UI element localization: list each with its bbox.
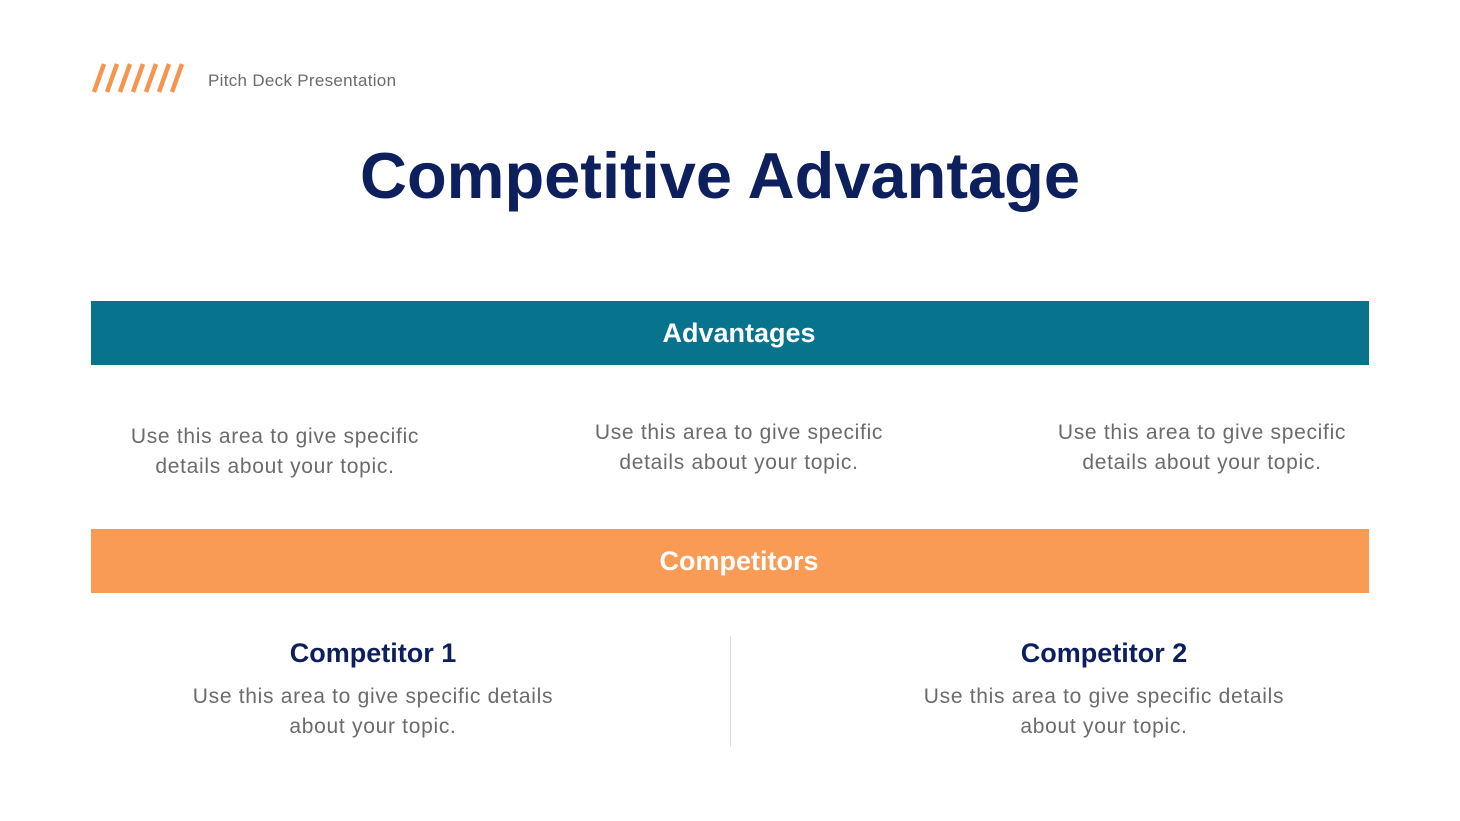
advantage text 3 — [1058, 421, 1346, 474]
competitor 1: about your topic. — [289, 715, 457, 738]
advantage text 2: Use this area to give specific — [595, 421, 883, 444]
advantage text 2: details about your topic. — [619, 451, 859, 474]
competitor 1 — [193, 638, 553, 738]
competitor 2: Competitor 2 — [1021, 638, 1187, 668]
competitor 2 — [924, 638, 1284, 738]
competitor 2: Use this area to give specific details — [924, 685, 1284, 708]
competitors bar — [91, 529, 1369, 593]
header label: Pitch Deck Presentation — [208, 71, 396, 90]
title: Competitive Advantage — [360, 139, 1080, 212]
divider — [730, 636, 731, 746]
advantages bar — [91, 301, 1369, 365]
competitor 1: Competitor 1 — [290, 638, 456, 668]
advantage text 1: Use this area to give specific — [131, 425, 419, 448]
advantage text 1 — [131, 425, 419, 478]
icon: orange stripes — [92, 63, 184, 93]
competitor 2: about your topic. — [1020, 715, 1188, 738]
advantage text 3: details about your topic. — [1082, 451, 1322, 474]
advantages bar: Advantages — [662, 318, 816, 348]
competitor 1: Use this area to give specific details — [193, 685, 553, 708]
advantage text 1: details about your topic. — [155, 455, 395, 478]
advantage text 2 — [595, 421, 883, 474]
competitors bar: Competitors — [659, 546, 818, 576]
advantage text 3: Use this area to give specific — [1058, 421, 1346, 444]
